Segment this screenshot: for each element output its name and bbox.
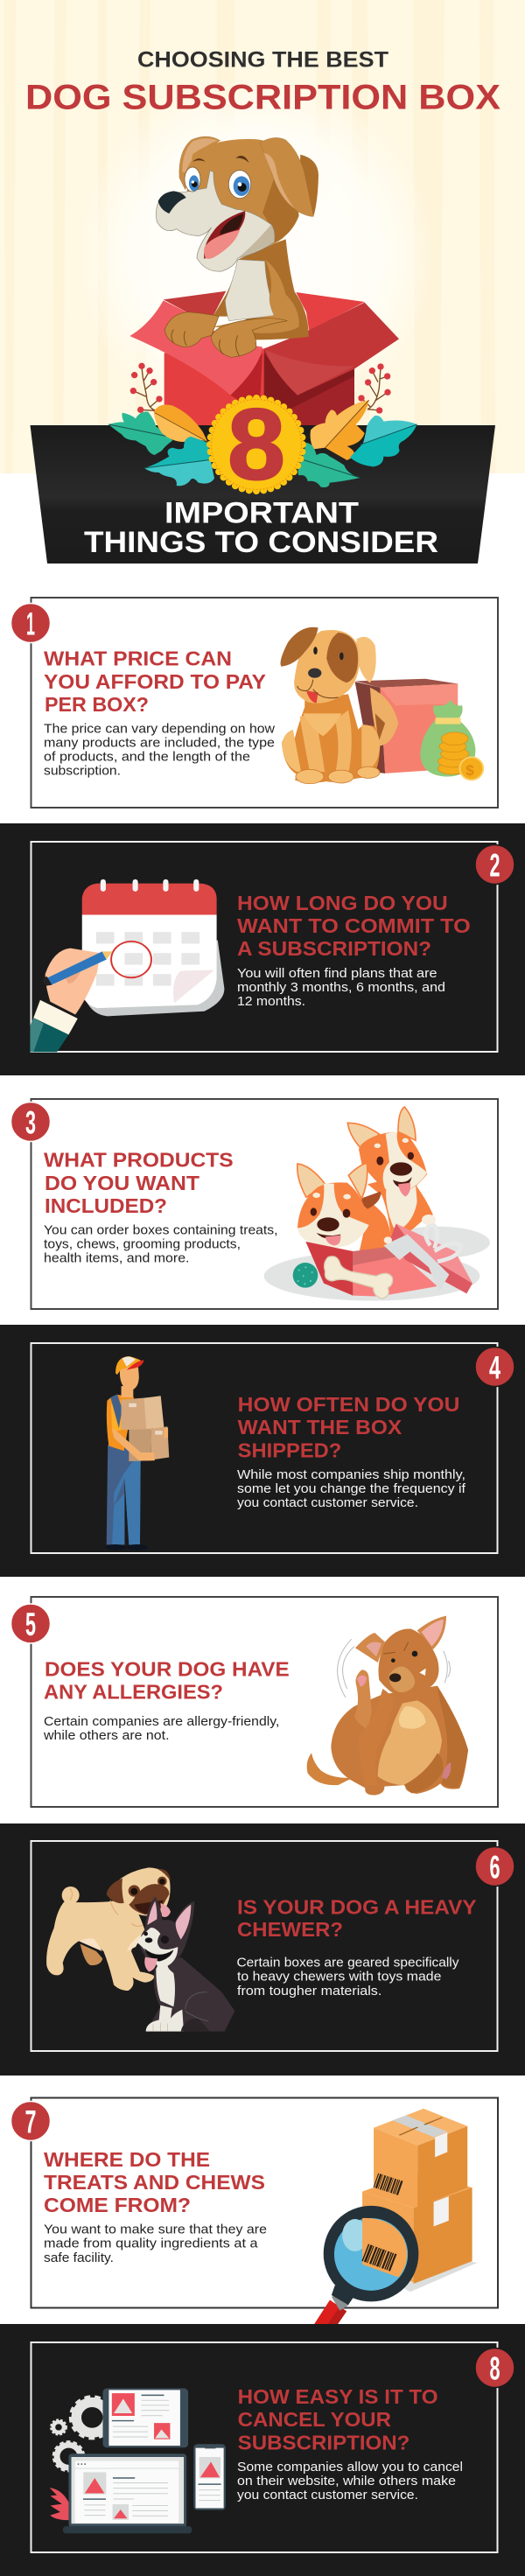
badge 8 [475, 2348, 514, 2387]
body 5 [43, 1715, 279, 1743]
body 1 [44, 723, 276, 779]
heading 3 [44, 1149, 234, 1217]
panel 5: allergies [10, 1597, 498, 1807]
heading 7: COME FROM? [44, 2194, 191, 2216]
title [25, 47, 500, 117]
banner heading: IMPORTANT [164, 497, 359, 530]
illustration: pug and boston terrier [46, 1867, 234, 2032]
badge 5 [10, 1604, 51, 1643]
body 8 [237, 2460, 463, 2502]
body 1: The price can vary depending on how [44, 723, 276, 737]
body 4: While most companies ship monthly, [237, 1468, 466, 1482]
body 7: You want to make sure that they are [44, 2223, 267, 2237]
badge 2: 2 [490, 847, 500, 884]
badge 6: 6 [490, 1850, 500, 1885]
body 5: while others are not. [43, 1729, 170, 1743]
panel 8: cancel [32, 2342, 514, 2552]
body 8: on their website, while others make [237, 2474, 456, 2488]
body 3: You can order boxes containing treats, [44, 1223, 278, 1237]
badge 4 [475, 1348, 514, 1386]
title: DOG SUBSCRIPTION BOX [25, 79, 500, 117]
body 2: monthly 3 months, 6 months, and [237, 981, 445, 995]
heading 8: SUBSCRIPTION? [238, 2431, 410, 2454]
badge 6 [475, 1846, 514, 1886]
illustration: boxes and magnifier [313, 2109, 477, 2326]
badge 1 [10, 604, 51, 642]
heading 7 [44, 2148, 265, 2216]
coin dollar sign: $ [466, 762, 474, 779]
heading 1: PER BOX? [45, 693, 149, 716]
heading 5: DOES YOUR DOG HAVE [45, 1657, 290, 1680]
panel 1: price [10, 598, 498, 808]
badge 2 [475, 845, 514, 884]
body 4: some let you change the frequency if [237, 1482, 466, 1496]
body 8: you contact customer service. [237, 2488, 418, 2502]
body 6: from tougher materials. [237, 1984, 382, 1998]
body 2 [237, 967, 445, 1009]
illustration: leaves and berries [108, 363, 417, 487]
heading 6: IS YOUR DOG A HEAVY [237, 1895, 477, 1918]
badge 1: 1 [26, 606, 35, 642]
badge 7: 7 [24, 2104, 37, 2140]
body 1: of products, and the length of the [44, 750, 250, 764]
header background [0, 0, 525, 473]
badge: number 8 [210, 388, 303, 500]
section band 4 [0, 1325, 525, 1577]
banner: dark ribbon [30, 425, 495, 564]
panel 4: frequency [32, 1343, 514, 1553]
heading 3: INCLUDED? [45, 1194, 167, 1217]
illustration: dog in red gift box [130, 136, 399, 431]
body 7 [44, 2223, 267, 2265]
body 6 [236, 1956, 459, 1998]
banner heading [84, 497, 438, 559]
heading 7: WHERE DO THE [44, 2148, 210, 2171]
body 8: Some companies allow you to cancel [237, 2460, 463, 2474]
title: CHOOSING THE BEST [137, 47, 388, 72]
panel 3: products [10, 1099, 498, 1309]
body 3: toys, chews, grooming products, [44, 1237, 241, 1251]
body 1: many products are included, the type [44, 737, 275, 751]
body 7: safe facility. [44, 2251, 114, 2265]
badge 4: 4 [489, 1349, 500, 1386]
section band 8 [0, 2324, 525, 2576]
heading 4: HOW OFTEN DO YOU [238, 1393, 459, 1416]
heading 6 [237, 1895, 477, 1941]
heading 8: HOW EASY IS IT TO [238, 2385, 438, 2408]
heading 4: WANT THE BOX [238, 1416, 402, 1438]
heading 3: DO YOU WANT [45, 1172, 200, 1194]
body 7: made from quality ingredients at a [44, 2237, 259, 2251]
section band 6 [0, 1824, 525, 2076]
heading 1 [44, 648, 266, 716]
heading 5 [44, 1657, 290, 1703]
body 4: you contact customer service. [237, 1496, 418, 1510]
illustration: dog with box and money bag [281, 627, 483, 784]
banner heading: THINGS TO CONSIDER [84, 526, 438, 559]
panel 7: origin [10, 2098, 498, 2326]
heading 4: SHIPPED? [238, 1438, 341, 1461]
badge 3 [10, 1102, 51, 1141]
illustration: corgis and gift [264, 1107, 490, 1301]
body 5: Certain companies are allergy-friendly, [44, 1715, 279, 1729]
body 4 [237, 1468, 466, 1510]
heading 3: WHAT PRODUCTS [44, 1149, 234, 1172]
heading 8: CANCEL YOUR [238, 2408, 391, 2431]
heading 4 [238, 1393, 459, 1461]
body 3: health items, and more. [44, 1251, 189, 1265]
badge 5: 5 [25, 1606, 36, 1642]
body 2: You will often find plans that are [237, 967, 438, 981]
body 1: subscription. [44, 765, 121, 779]
heading 5: ANY ALLERGIES? [44, 1680, 223, 1703]
illustration: calendar and hand [30, 879, 224, 1052]
heading 1: WHAT PRICE CAN [44, 648, 232, 670]
panel 6: chewer [32, 1841, 514, 2051]
body 3 [44, 1223, 278, 1265]
badge 7 [10, 2102, 51, 2140]
illustration: devices and gears [50, 2389, 226, 2533]
badge 8: 8 [490, 2350, 500, 2387]
panel 2: commitment [30, 842, 514, 1052]
body 6: to heavy chewers with toys made [237, 1970, 441, 1984]
section band 2 [0, 823, 525, 1075]
heading 1: YOU AFFORD TO PAY [44, 670, 266, 693]
heading 2: HOW LONG DO YOU [237, 892, 448, 914]
heading 2 [237, 892, 471, 960]
heading 2: WANT TO COMMIT TO [237, 914, 471, 937]
body 6: Certain boxes are geared specifically [236, 1956, 459, 1970]
badge: number 8: 8 [228, 388, 285, 500]
heading 8 [238, 2385, 438, 2454]
illustration: scratching dog [307, 1616, 468, 1796]
heading 7: TREATS AND CHEWS [44, 2171, 265, 2194]
illustration: delivery man [106, 1356, 169, 1550]
heading 6: CHEWER? [237, 1918, 343, 1941]
badge 3: 3 [25, 1104, 36, 1141]
heading 2: A SUBSCRIPTION? [237, 937, 431, 960]
body 2: 12 months. [237, 995, 305, 1009]
